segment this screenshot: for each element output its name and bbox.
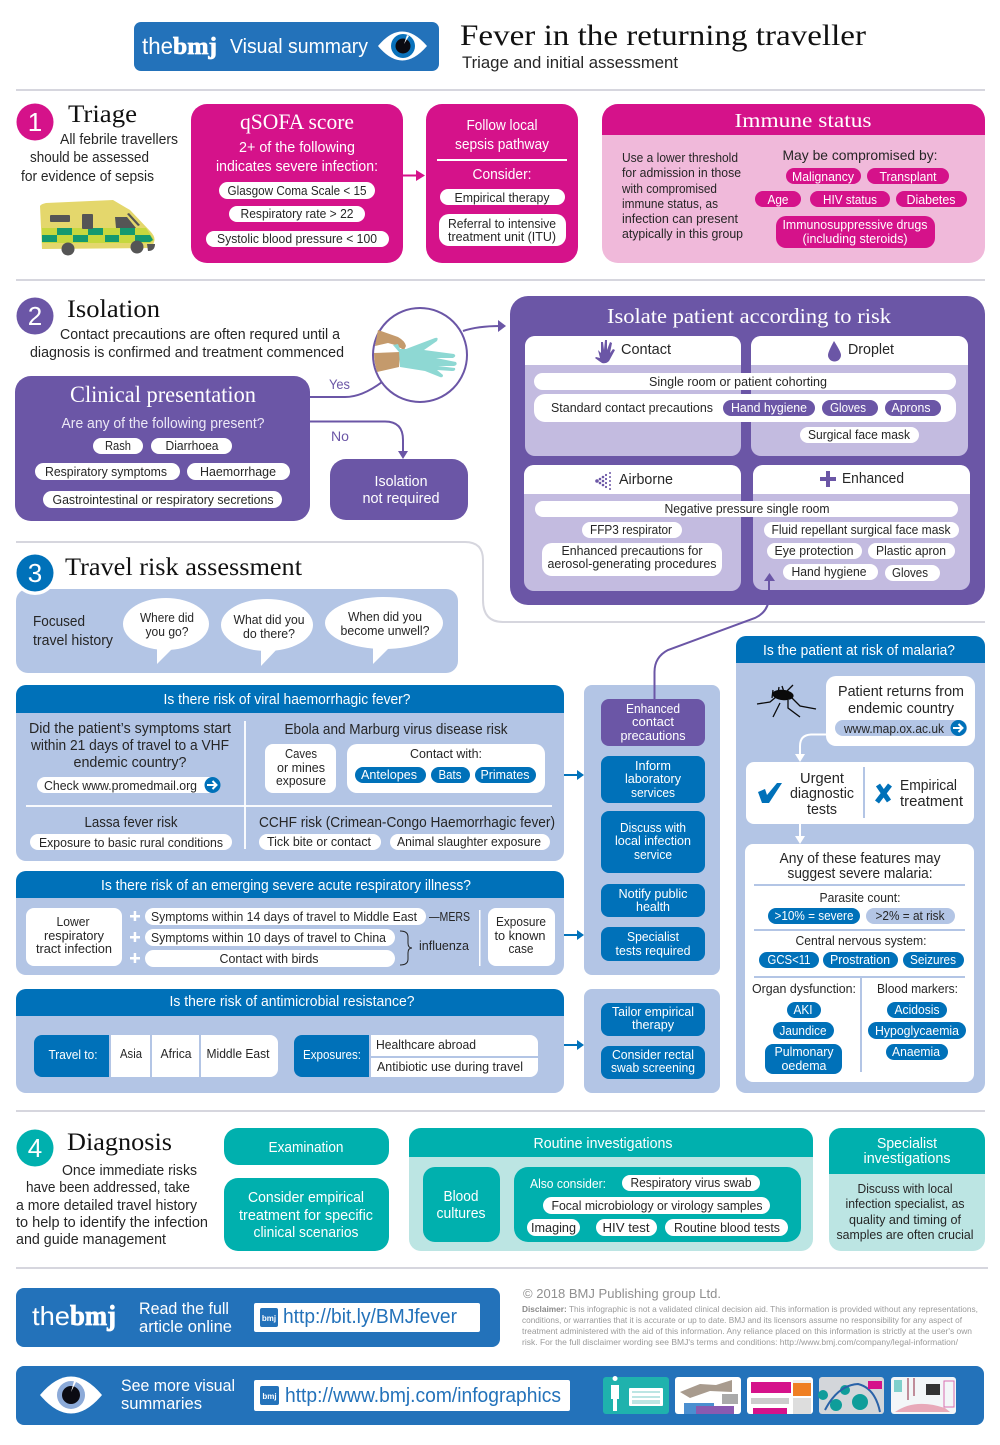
panel: actions for VHF and SARI: health [636,900,670,914]
icon: arrow circle [950,720,966,736]
panel: specialist investigations: samples are often crucial [836,1228,974,1242]
arrow: tests to features [795,824,805,844]
features of severe malaria: Seizures [910,953,956,967]
shared pills: Hand hygiene [792,565,867,579]
footer panel: see more visual summaries: See more visual [121,1377,235,1395]
arrow: circle to isolate panel [463,320,506,332]
contact quadrant [525,336,741,456]
speech bubble: when did you become unwell: When did you [348,610,422,624]
panel: examination [224,1128,389,1165]
panel: viral haemorrhagic fever: Contact with: [410,747,482,761]
shared pills: Negative pressure single room [664,502,830,516]
panel: emerging severe acute respiratory illness: respiratory [44,929,105,943]
panel: immune status: atypically in this group [622,227,743,241]
panel: antimicrobial resistance: Travel to: [48,1048,98,1062]
arrow: SARI to actions [564,930,584,940]
panel: viral haemorrhagic fever: Lassa fever risk [84,815,178,831]
panel: routine investigations: HIV test [602,1221,650,1235]
panel: immune status: Use a lower threshold [622,151,738,165]
shared pills: Gloves [830,401,866,415]
panel: actions for antimicrobial resistance [584,989,720,1093]
features of severe malaria: Acidosis [894,1003,940,1017]
features of severe malaria: oedema [782,1059,827,1073]
speech bubble: what did you do there [221,599,313,666]
panel: follow local sepsis pathway: Follow local [466,118,538,134]
panel: follow local sepsis pathway: Empirical therapy [454,191,550,205]
panel: routine investigations: Focal microbiology or virology samples [552,1199,762,1213]
panel: immune status: Age [768,193,789,207]
panel: viral haemorrhagic fever [16,685,564,861]
panel: actions for VHF and SARI: contact [632,715,675,729]
features of severe malaria: Parasite count: [820,891,900,905]
header badge: the bmj visual summary: bmj [173,34,217,60]
panel: immune status: Immune status [734,110,872,132]
panel: actions for VHF and SARI: services [631,786,675,800]
section 1 heading: triage: 1 [28,107,42,137]
panel: viral haemorrhagic fever: Primates [480,768,530,782]
copyright and disclaimer: treatment administered with the aid of this information. Any reliance placed on this information is strictly at the user's own [522,1326,972,1336]
panel: emerging severe acute respiratory illness: Symptoms within 14 days of travel to Middle East [151,910,418,924]
airborne quadrant [524,465,741,591]
panel: immune status: with compromised [621,182,717,196]
triage text [21,132,178,185]
section 3 number: 3 [28,558,42,588]
section 2 heading: isolation: Isolation [67,296,161,323]
panel: immune status: Diabetes [906,193,956,207]
section 2 heading: isolation [16,296,161,334]
subtitle: Triage and initial assessment [462,53,678,72]
arrow: yes path [310,376,382,397]
header badge: the bmj visual summary: Visual summary [230,36,368,58]
panel: clinical presentation: Are any of the following present? [62,416,264,432]
footer panel: see more visual summaries: http://www.bmj.com/infographics [285,1385,561,1407]
section 2 heading: isolation: 2 [28,301,42,331]
shared pills: Fluid repellant surgical face mask [772,523,951,537]
panel: follow local sepsis pathway: treatment unit (ITU) [448,230,556,244]
speech bubble: when did you become unwell [325,597,443,664]
speech bubble: where did you go: you go? [146,625,189,639]
panel: actions for VHF and SARI: service [634,848,672,862]
footer panel: read the full article: bmj [70,1301,116,1332]
panel: clinical presentation: Gastrointestinal or respiratory secretions [52,493,274,507]
panel: actions for VHF and SARI: Inform [635,759,671,773]
panel: viral haemorrhagic fever: exposure [276,774,326,788]
section 4 heading: diagnosis [16,1129,172,1166]
panel: follow local sepsis pathway [426,104,578,263]
header badge: the bmj visual summary: the [142,33,173,59]
panel: consider empirical treatment: Consider empirical [248,1190,364,1206]
panel: isolation not required: Isolation [374,474,428,490]
features of severe malaria: Jaundice [780,1024,827,1038]
panel: consider empirical treatment [224,1178,389,1251]
panel: immune status: Malignancy [792,170,855,184]
features of severe malaria: Blood markers: [877,982,958,996]
diagnosis text: a more detailed travel history [16,1198,198,1214]
panel: follow local sepsis pathway: Referral to intensive [448,217,556,231]
section 4 heading: diagnosis: Diagnosis [67,1129,172,1156]
panel: actions for VHF and SARI: Notify public [618,887,688,901]
header badge: the bmj visual summary [134,22,439,71]
features of severe malaria: GCS<11 [768,953,811,967]
shared pills: Surgical face mask [808,428,911,442]
panel: clinical presentation: Clinical presentation [70,382,256,407]
isolation text: Contact precautions are often requred until a [60,327,341,343]
panel: qSOFA score: Systolic blood pressure < 100 [217,232,377,246]
icon: ambulance [40,200,155,256]
panel: follow local sepsis pathway: sepsis pathway [455,137,550,153]
panel: viral haemorrhagic fever: Bats [438,768,462,782]
icon: eye [40,1376,102,1414]
footer panel: read the full article [16,1288,500,1347]
panel: consider empirical treatment: clinical scenarios [254,1225,358,1241]
panel: immune status: infection can present [622,212,739,226]
panel: follow local sepsis pathway: Consider: [472,167,532,183]
panel: immune status: Transplant [880,170,937,184]
copyright and disclaimer: conditions, or warranties that it is accurate or up to date. BMJ and its licensors assume no responsibility for any aspect of [522,1315,963,1325]
panel: routine investigations: Also consider: [530,1177,606,1191]
panel: qSOFA score: Respiratory rate > 22 [240,207,354,221]
copyright and disclaimer: Disclaimer: This infographic is not a validated clinical decision aid. This information is provided without any representations, [522,1304,978,1314]
section 3 number [13,551,57,595]
features of severe malaria: Pulmonary [774,1045,834,1059]
diagnosis text [16,1163,208,1248]
panel: malaria: endemic country [848,701,955,717]
shared pills: Eye protection [774,544,854,558]
speech bubble: what did you do there: do there? [243,627,295,641]
panel: viral haemorrhagic fever: Check www.promedmail.org [44,779,197,793]
panel: routine investigations: Blood [444,1189,478,1205]
footer panel: read the full article: bmj [262,1314,276,1323]
panel: antimicrobial resistance: Africa [160,1047,192,1061]
panel: clinical presentation: Respiratory symptoms [45,465,167,479]
icon: arrow circle [204,777,220,793]
speech bubble: where did you go [123,598,209,664]
arrow: returns to tests [795,734,826,762]
features of severe malaria: >2% = at risk [876,909,945,923]
panel: antimicrobial resistance: Asia [120,1047,142,1061]
panel: antimicrobial resistance: Is there risk of antimicrobial resistance? [170,994,414,1010]
copyright and disclaimer: risk. For the full disclaimer wording see BMJ's terms and conditions: http://www.bmj.com/company/legal-information/ [522,1337,959,1347]
features of severe malaria: Anaemia [892,1045,940,1059]
diagnosis text: have been addressed, take [26,1180,190,1196]
shared pills: Enhanced precautions for [562,544,702,558]
footer panel: see more visual summaries: summaries [121,1395,202,1413]
panel: emerging severe acute respiratory illness: Is there risk of an emerging severe acute respiratory illness? [101,878,471,894]
panel: emerging severe acute respiratory illness: to known [494,929,546,943]
shared pills [534,373,959,581]
diagnosis text: Once immediate risks [62,1163,197,1179]
panel: specialist investigations: investigations [864,1151,950,1167]
panel: viral haemorrhagic fever: CCHF risk (Crimean-Congo Haemorrhagic fever) [259,815,555,831]
isolation text: diagnosis is confirmed and treatment commenced [30,345,344,361]
panel: qSOFA score: 2+ of the following [239,140,355,156]
panel: immune status: for admission in those [622,166,741,180]
panel: actions for antimicrobial resistance: therapy [632,1018,675,1032]
panel: actions for VHF and SARI: precautions [620,729,686,743]
arrow: VHF to actions [564,770,584,780]
icon: tick [758,783,782,803]
panel: viral haemorrhagic fever: within 21 days of travel to a VHF [30,738,229,754]
panel: viral haemorrhagic fever: Did the patient’s symptoms start [29,721,231,737]
icon: gloved hand in circle [373,308,467,402]
copyright and disclaimer: © 2018 BMJ Publishing group Ltd. [523,1286,721,1301]
panel: consider empirical treatment: treatment for specific [239,1208,373,1224]
panel: antimicrobial resistance [16,989,564,1093]
panel: specialist investigations [829,1128,985,1251]
panel: malaria: diagnostic [790,786,854,802]
panel: clinical presentation [15,376,310,521]
panel: emerging severe acute respiratory illness: tract infection [36,942,112,956]
features of severe malaria: AKI [794,1003,812,1017]
panel: viral haemorrhagic fever: Is there risk of viral haemorrhagic fever? [164,692,410,708]
panel: focused travel history [16,589,458,673]
panel: actions for antimicrobial resistance: Consider rectal [612,1048,694,1062]
enhanced quadrant [753,465,970,590]
panel: isolate patient according to risk [510,296,985,605]
shared pills: Single room or patient cohorting [649,375,827,389]
panel: focused travel history: Focused [33,614,85,630]
shared pills: FFP3 respirator [590,523,672,537]
panel: malaria: Urgent [800,771,844,787]
speech bubble: when did you become unwell: become unwell? [340,624,430,638]
thumbnails of other visual summaries [603,1376,956,1414]
icon: cross [877,785,890,802]
shared pills: Gloves [892,566,928,580]
enhanced quadrant: Enhanced [842,471,904,487]
panel: specialist investigations: infection specialist, as [846,1197,964,1211]
panel: immune status: Immunosuppressive drugs [782,218,928,232]
panel: examination: Examination [268,1140,344,1156]
triage text: for evidence of sepsis [21,169,154,185]
section 1 heading: triage: Triage [68,101,137,128]
panel: specialist investigations: Discuss with local [858,1182,952,1196]
panel: emerging severe acute respiratory illness: influenza [419,939,469,953]
panel: malaria: tests [807,802,837,818]
panel: clinical presentation: Haemorrhage [200,465,276,479]
panel: immune status: May be compromised by: [782,147,938,163]
speech bubble: what did you do there: What did you [234,613,305,627]
panel: emerging severe acute respiratory illness: —MERS [429,910,470,924]
droplet quadrant [751,336,968,456]
droplet quadrant: Droplet [848,342,894,358]
icon: mosquito [757,685,816,717]
footer panel: read the full article: http://bit.ly/BMJfever [283,1306,457,1328]
panel: qSOFA score: qSOFA score [240,109,354,134]
panel: antimicrobial resistance: Antibiotic use during travel [377,1060,523,1074]
panel: malaria: Empirical [900,778,957,794]
panel: routine investigations: Imaging [531,1221,576,1235]
panel: antimicrobial resistance: Exposures: [303,1048,361,1062]
section 1 heading: triage [16,101,137,140]
footer panel: read the full article: Read the full [139,1300,229,1318]
panel: actions for VHF and SARI: Enhanced [626,702,680,716]
panel: actions for VHF and SARI: local infection [615,834,691,848]
panel: malaria: www.map.ox.ac.uk [843,722,945,736]
panel: isolate patient according to risk: Isolate patient according to risk [607,304,891,328]
arrow: qSOFA to sepsis pathway [403,170,425,181]
features of severe malaria: Prostration [830,953,890,967]
panel: focused travel history: travel history [33,633,114,649]
panel: viral haemorrhagic fever: Animal slaughter exposure [397,835,541,849]
features of severe malaria: Any of these features may [780,851,941,867]
panel: routine investigations: cultures [436,1206,486,1222]
footer panel: read the full article: the [32,1301,70,1331]
panel: isolation not required: not required [362,491,440,507]
panel: actions for antimicrobial resistance: swab screening [611,1061,695,1075]
arrow: AMR to actions [564,1040,584,1050]
panel: actions for VHF and SARI: tests required [616,944,691,958]
panel: emerging severe acute respiratory illness: Lower [56,915,90,929]
panel: antimicrobial resistance: Middle East [206,1047,270,1061]
panel: viral haemorrhagic fever: endemic country? [74,755,186,771]
isolation text [30,327,344,361]
panel: specialist investigations: Specialist [877,1136,937,1152]
panel: emerging severe acute respiratory illness: Exposure [496,915,546,929]
panel: actions for VHF and SARI: Discuss with [620,821,686,835]
panel: immune status: immune status, as [622,197,718,211]
panel: qSOFA score: Glasgow Coma Scale < 15 [228,184,367,198]
triage text: All febrile travellers [60,132,178,148]
panel: immune status: HIV status [823,193,877,207]
panel: actions for VHF and SARI: laboratory [625,772,682,786]
title: Fever in the returning traveller [460,19,866,52]
panel: viral haemorrhagic fever: Ebola and Marburg virus disease risk [284,722,508,738]
arrow: no path [310,422,408,459]
features of severe malaria: Central nervous system: [796,934,926,948]
panel: qSOFA score: indicates severe infection: [216,159,378,175]
panel: viral haemorrhagic fever: Exposure to basic rural conditions [39,836,223,850]
copyright and disclaimer [522,1286,978,1347]
panel: clinical presentation: Rash [105,439,131,453]
diagnosis text: and guide management [16,1232,166,1248]
panel: routine investigations: Routine investigations [534,1136,672,1152]
panel: malaria: Patient returns from [838,684,964,700]
panel: malaria: treatment [900,794,963,810]
panel: viral haemorrhagic fever: or mines [277,761,325,775]
contact quadrant: Contact [621,342,671,358]
panel: actions for VHF and SARI [584,685,720,975]
features of severe malaria [745,844,974,1082]
features of severe malaria: >10% = severe [774,909,854,923]
diagnosis text: to help to identify the infection [16,1215,208,1231]
triage text: should be assessed [30,150,149,166]
panel: qSOFA score [191,104,403,263]
footer panel: see more visual summaries: bmj [262,1392,277,1401]
footer panel: see more visual summaries [16,1366,984,1425]
airborne quadrant: Airborne [619,472,673,488]
panel: isolation not required [330,459,468,520]
features of severe malaria: Organ dysfunction: [752,982,856,996]
section 4 heading: diagnosis: 4 [28,1133,42,1163]
panel: clinical presentation: Diarrhoea [166,439,219,453]
shared pills: Standard contact precautions [551,401,713,415]
panel: antimicrobial resistance: Healthcare abroad [376,1038,476,1052]
panel: emerging severe acute respiratory illness: Symptoms within 10 days of travel to China [151,931,386,945]
panel: malaria [736,636,985,1093]
panel: immune status [602,104,985,263]
shared pills: Aprons [892,401,930,415]
panel: emerging severe acute respiratory illness: case [508,942,534,956]
panel: routine investigations [409,1128,813,1251]
panel: routine investigations: Routine blood tests [674,1221,780,1235]
shared pills: Plastic apron [876,544,946,558]
features of severe malaria: Hypoglycaemia [875,1024,959,1038]
panel: viral haemorrhagic fever: Antelopes [361,768,417,782]
section 3 heading: travel risk assessment: Travel risk assessment [65,554,302,581]
shared pills: aerosol-generating procedures [548,557,716,571]
panel: malaria: Is the patient at risk of malaria? [763,643,955,659]
arrow: yes path: Yes [329,376,350,392]
panel: specialist investigations: quality and timing of [849,1213,962,1227]
speech bubble: where did you go: Where did [140,611,194,625]
features of severe malaria: suggest severe malaria: [788,866,932,882]
footer panel: read the full article: article online [139,1318,232,1336]
shared pills: Hand hygiene [731,401,807,415]
panel: viral haemorrhagic fever: Tick bite or contact [267,835,372,849]
panel: emerging severe acute respiratory illness: Contact with birds [220,952,318,966]
panel: routine investigations: Respiratory virus swab [630,1176,752,1190]
panel: actions for antimicrobial resistance: Tailor empirical [612,1005,694,1019]
panel: viral haemorrhagic fever: Caves [285,747,317,761]
panel: immune status: (including steroids) [802,232,908,246]
panel: emerging severe acute respiratory illness [16,871,564,975]
arrow: no path: No [331,428,349,444]
arrow: enhanced precautions up to enhanced quadrant [654,573,775,699]
panel: actions for VHF and SARI: Specialist [627,930,680,944]
